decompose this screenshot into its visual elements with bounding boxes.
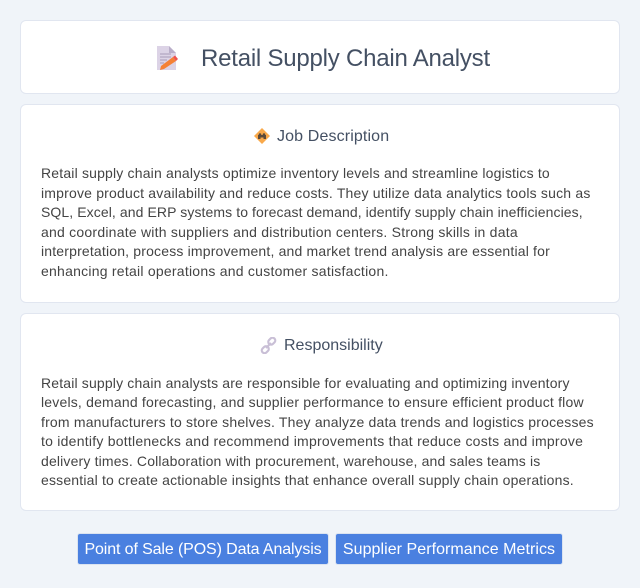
tag: point of sale data analysis [78, 534, 328, 564]
tag: supplier performance metrics [336, 534, 562, 564]
panel: job description [20, 104, 620, 303]
text block: job description: and coordinate with suppliers and distribution centers. Strong skills in data [41, 224, 518, 240]
panel: title card [20, 20, 620, 94]
tag: point of sale data analysis: Point of Sale (POS) Data Analysis [84, 541, 322, 558]
text block: responsibility [41, 375, 594, 488]
tag: supplier performance metrics: Supplier Performance Metrics [343, 541, 555, 558]
title: Retail Supply Chain Analyst [201, 45, 490, 72]
text block: job description [41, 165, 591, 279]
text block: responsibility: levels, demand forecasting, and supplier performance to ensure efficient product flow [41, 394, 584, 410]
text block: responsibility: from manufacturers to store shelves. They analyze data trends and logistics processes [41, 414, 594, 430]
text block: responsibility: Retail supply chain analysts are responsible for evaluating and optimizing inventory [41, 375, 570, 391]
text block: job description: Retail supply chain analysts optimize inventory levels and streamline logistics to [41, 165, 550, 181]
icon: puzzle diamond [254, 128, 270, 144]
text block: responsibility: essential to create actionable insights that enhance overall supply chain operations. [41, 472, 574, 488]
heading: responsibility: Responsibility [284, 337, 383, 354]
text block: job description: SQL, Excel, and ERP systems to forecast demand, identify supply chain inefficiencies, [41, 204, 583, 220]
icon: chain link [260, 337, 276, 354]
text block: job description: improve product availability and reduce costs. They utilize data analytics tools such as [41, 185, 591, 201]
heading: job description: Job Description [277, 128, 389, 145]
text block: responsibility: delivery times. Collaboration with procurement, warehouse, and sales teams is [41, 453, 540, 469]
icon: document with pencil [157, 46, 178, 70]
text block: responsibility: to identify bottlenecks and recommend improvements that reduce costs and improve [41, 433, 583, 449]
text block: job description: interpretation, process improvement, and market trend analysis are essential for [41, 243, 550, 259]
text block: job description: enhancing retail operations and customer satisfaction. [41, 263, 389, 279]
panel: responsibility [20, 313, 620, 511]
